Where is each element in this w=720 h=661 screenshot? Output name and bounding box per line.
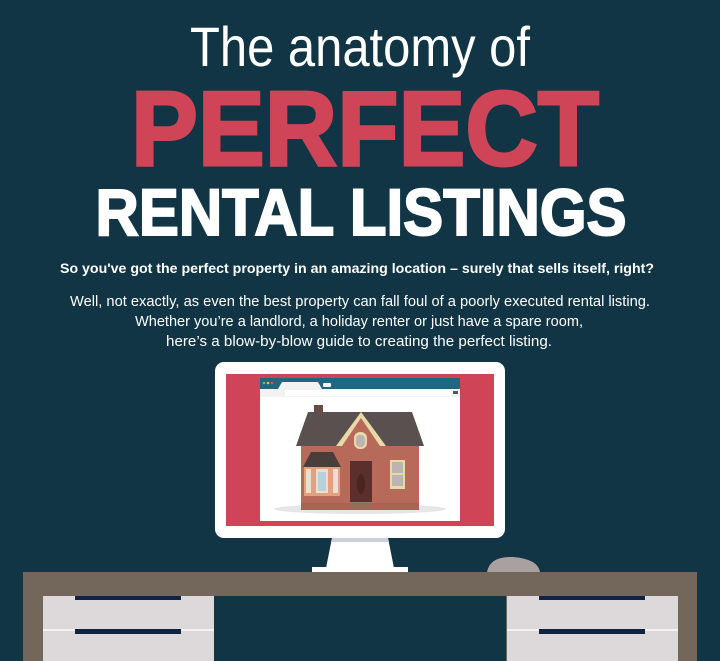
desk — [23, 572, 697, 661]
title: PERFECT: PERFECT — [131, 70, 599, 188]
title: RENTAL LISTINGS: RENTAL LISTINGS — [96, 175, 626, 249]
title line 1: The anatomy of — [190, 15, 530, 78]
left drawers — [43, 596, 214, 661]
house illustration — [274, 405, 446, 514]
monitor stand — [312, 538, 408, 572]
intro paragraph — [70, 293, 650, 350]
screen — [226, 374, 494, 526]
mouse — [487, 557, 540, 572]
intro paragraph: Well, not exactly, as even the best property can fall foul of a poorly executed rental listing. — [70, 293, 650, 310]
monitor — [215, 362, 505, 572]
browser window — [260, 378, 460, 521]
intro paragraph: Whether you’re a landlord, a holiday renter or just have a spare room, — [135, 313, 583, 330]
right drawers — [507, 596, 678, 661]
subtitle: So you've got the perfect property in an amazing location – surely that sells itself, right? — [60, 260, 654, 276]
intro paragraph: here’s a blow-by-blow guide to creating the perfect listing. — [166, 333, 552, 350]
